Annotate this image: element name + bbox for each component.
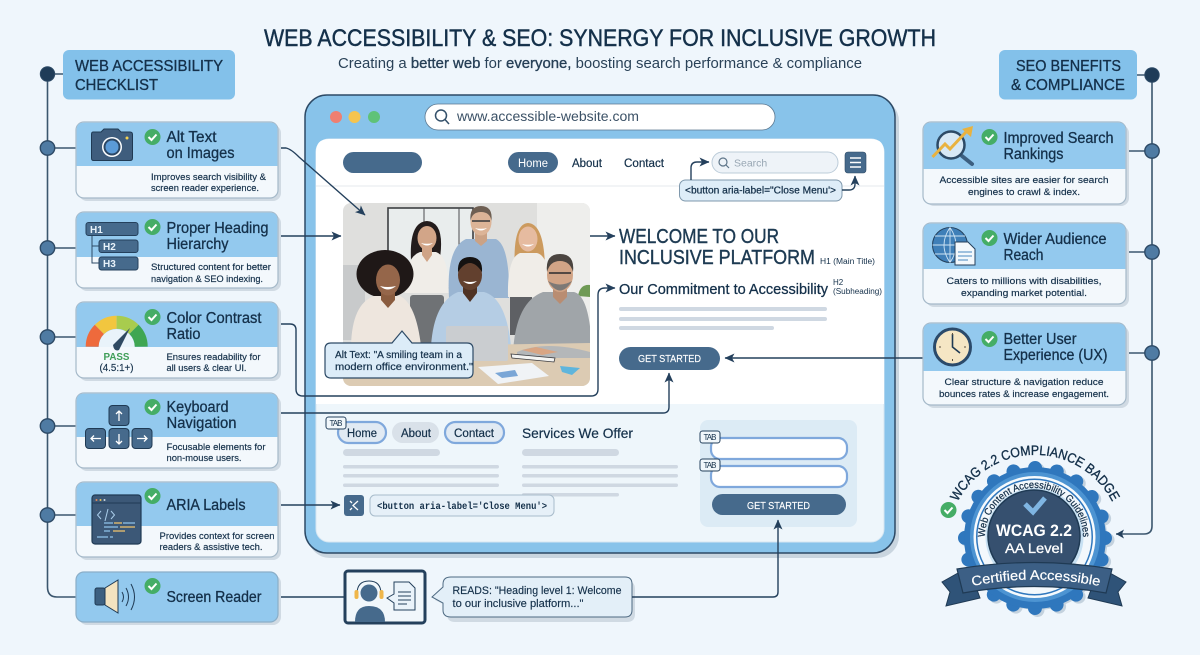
check badge (940, 502, 956, 518)
card: better user experience (923, 323, 1129, 408)
card: aria labels: ARIA Labels (166, 497, 246, 514)
heading: web accessibility checklist (63, 50, 235, 100)
team photo (343, 203, 592, 386)
desk with laptop (343, 326, 590, 386)
arrow from screen reader to form button (632, 520, 778, 597)
navigation menu: Contact (624, 158, 665, 170)
icon: camera (92, 129, 132, 160)
keyboard tab order menu: TAB (330, 419, 342, 428)
screen reader speech bubble: READS: "Heading level 1: Welcome (452, 585, 622, 597)
card: proper heading hierarchy: navigation & SEO indexing. (151, 274, 263, 285)
keyboard tab order menu: Home (347, 428, 377, 440)
window controls (330, 111, 380, 123)
icon: search magnifier with growth arrow (932, 126, 973, 164)
card: improved search rankings: engines to crawl & index. (968, 187, 1080, 198)
get started button: GET STARTED (638, 354, 701, 365)
left timeline connector (40, 67, 76, 597)
card: keyboard navigation: non-mouse users. (166, 453, 242, 464)
close button code tag (370, 495, 554, 516)
subtitle: Creating a better web for everyone, boosting search performance & compliance (338, 55, 862, 72)
card: alt text on images: Alt Text (166, 129, 217, 146)
check badge (982, 331, 998, 347)
logo placeholder (343, 152, 422, 173)
heading: web accessibility checklist: WEB ACCESSIBILITY (75, 58, 223, 75)
sign up form (700, 420, 857, 527)
card: aria labels (76, 482, 281, 560)
title: WEB ACCESSIBILITY & SEO: SYNERGY FOR INCLUSIVE GROWTH (264, 25, 936, 52)
h1 heading: WELCOME TO OUR (619, 226, 779, 248)
screen reader speech bubble: to our inclusive platform..." (452, 598, 584, 610)
person: back centre man (449, 206, 509, 298)
card: better user experience: bounces rates & increase engagement. (939, 389, 1109, 400)
card: aria labels: readers & assistive tech. (160, 542, 262, 553)
scalloped seal: WCAG 2.2 (996, 521, 1072, 540)
services section: Services We Offer (522, 425, 633, 441)
h2 heading: (Subheading) (833, 287, 882, 296)
h2 heading: H2 (833, 278, 844, 287)
aria label code tag (680, 180, 842, 201)
arrows to search and menu (691, 162, 855, 190)
h1 heading (619, 226, 875, 269)
navigation menu: About (572, 158, 603, 170)
alt text callout (325, 331, 474, 378)
body text placeholder (619, 307, 827, 330)
wcag compliance badge (940, 445, 1127, 617)
connector arrows from cards to page (278, 148, 923, 597)
card: color contrast ratio: Color Contrast (166, 310, 262, 327)
icon: heading levels: H2 (103, 242, 116, 253)
icon: arrow keys (86, 406, 152, 448)
card: wider audience reach (923, 223, 1129, 307)
check badge (144, 309, 160, 325)
icon: heading levels: H3 (103, 259, 116, 270)
check badge (144, 578, 160, 594)
card: alt text on images: Improves search visibility & (151, 172, 267, 183)
card: keyboard navigation: Focusable elements for (166, 442, 266, 453)
scalloped seal: AA Level (1005, 540, 1063, 556)
scalloped seal (958, 461, 1114, 617)
check badge (144, 219, 160, 235)
card: color contrast ratio: Ratio (166, 326, 200, 343)
card: improved search rankings: Rankings (1004, 146, 1064, 163)
heading: seo benefits and compliance: SEO BENEFITS (1016, 58, 1121, 75)
icon: speaker (95, 580, 134, 613)
browser window (305, 95, 899, 558)
card: keyboard navigation: Keyboard (166, 399, 228, 416)
heading: seo benefits and compliance (999, 50, 1137, 100)
certified accessible ribbon: Certified Accessible (972, 570, 1100, 586)
card: better user experience: Experience (UX) (1004, 347, 1108, 364)
aria label code tag: <button aria-label="Close Menu'> (685, 186, 836, 196)
card: wider audience reach: Caters to millions with disabilities, (946, 276, 1102, 287)
alt text callout: Alt Text: "A smiling team in a (335, 350, 463, 361)
icon: contrast gauge (92, 322, 141, 350)
card: color contrast ratio: all users & clear UI. (166, 363, 246, 374)
hamburger menu button (845, 152, 866, 173)
card: wider audience reach: Wider Audience (1004, 231, 1106, 248)
icon: heading levels (86, 222, 138, 270)
heading: web accessibility checklist: CHECKLIST (75, 77, 158, 94)
heading: seo benefits and compliance: & COMPLIANCE (1011, 77, 1125, 94)
badge curved title: WCAG 2.2 COMPLIANCE BADGE (949, 445, 1120, 502)
card: alt text on images: screen reader experience. (151, 183, 259, 194)
right timeline connector (1116, 68, 1159, 539)
card: improved search rankings: Accessible sites are easier for search (940, 175, 1108, 186)
navigation menu: Home (518, 158, 548, 170)
icon: code window (92, 495, 141, 544)
icon: clock (934, 329, 970, 365)
check badge (982, 129, 998, 145)
screen reader speech bubble (432, 577, 635, 622)
screen reader user icon (345, 571, 425, 623)
certified accessible ribbon (941, 562, 1127, 607)
search field: Search (734, 158, 767, 170)
card: keyboard navigation: Navigation (166, 415, 236, 432)
person: front centre man (431, 257, 511, 346)
card: proper heading hierarchy: Structured content for better (151, 262, 272, 273)
card: better user experience: Better User (1004, 331, 1076, 348)
icon: heading levels: H1 (90, 225, 103, 236)
card: aria labels: Provides context for screen (160, 531, 274, 542)
person: right man (514, 254, 590, 344)
card: wider audience reach: expanding market potential. (961, 288, 1087, 299)
card: keyboard navigation (76, 393, 281, 471)
h2 heading: Our Commitment to Accessibility (619, 281, 828, 298)
card: color contrast ratio: Ensures readability for (166, 352, 261, 363)
card: screen reader: Screen Reader (166, 589, 262, 606)
keyboard tab order menu (326, 417, 504, 443)
h1 heading: H1 (Main Title) (820, 257, 875, 266)
sign up form: TAB (704, 433, 716, 442)
alt text callout: modern office environment." (335, 362, 474, 373)
card: wider audience reach: Reach (1004, 247, 1044, 264)
scalloped seal: Web Content Accessibility Guidelines (978, 482, 1088, 537)
h2 heading (619, 278, 882, 298)
card: color contrast ratio: (4.5:1+) (99, 363, 134, 374)
search field (712, 152, 838, 173)
navigation menu (508, 152, 665, 173)
card: alt text on images (76, 122, 281, 201)
services section (343, 425, 678, 496)
check badge (144, 399, 160, 415)
address bar (425, 104, 775, 130)
keyboard tab order menu: About (401, 428, 432, 440)
check badge (144, 129, 160, 145)
person: front left woman (351, 250, 421, 346)
check badge (144, 488, 160, 504)
card: improved search rankings: Improved Search (1004, 130, 1114, 147)
card: proper heading hierarchy: Proper Heading (166, 220, 268, 237)
card: color contrast ratio: PASS (104, 352, 130, 363)
close button code tag: <button aria-label='Close Menu'> (377, 501, 547, 513)
sign up form: GET STARTED (747, 501, 810, 512)
icon: globe with document (932, 228, 975, 265)
close button (344, 495, 364, 516)
card: proper heading hierarchy (76, 212, 281, 291)
check badge (982, 230, 998, 246)
card: screen reader (76, 572, 281, 625)
h1 heading: INCLUSIVE PLATFORM (619, 247, 815, 269)
card: proper heading hierarchy: Hierarchy (166, 236, 229, 253)
card: color contrast ratio (76, 302, 281, 381)
person: back left woman (405, 221, 449, 293)
address bar: www.accessible-website.com (456, 109, 639, 124)
sign up form: TAB (704, 461, 716, 470)
get started button (619, 347, 720, 370)
person: back right woman (508, 223, 545, 297)
keyboard tab order menu: Contact (454, 428, 495, 440)
card: better user experience: Clear structure & navigation reduce (944, 377, 1104, 388)
card: improved search rankings (923, 122, 1129, 206)
card: alt text on images: on Images (166, 145, 235, 162)
